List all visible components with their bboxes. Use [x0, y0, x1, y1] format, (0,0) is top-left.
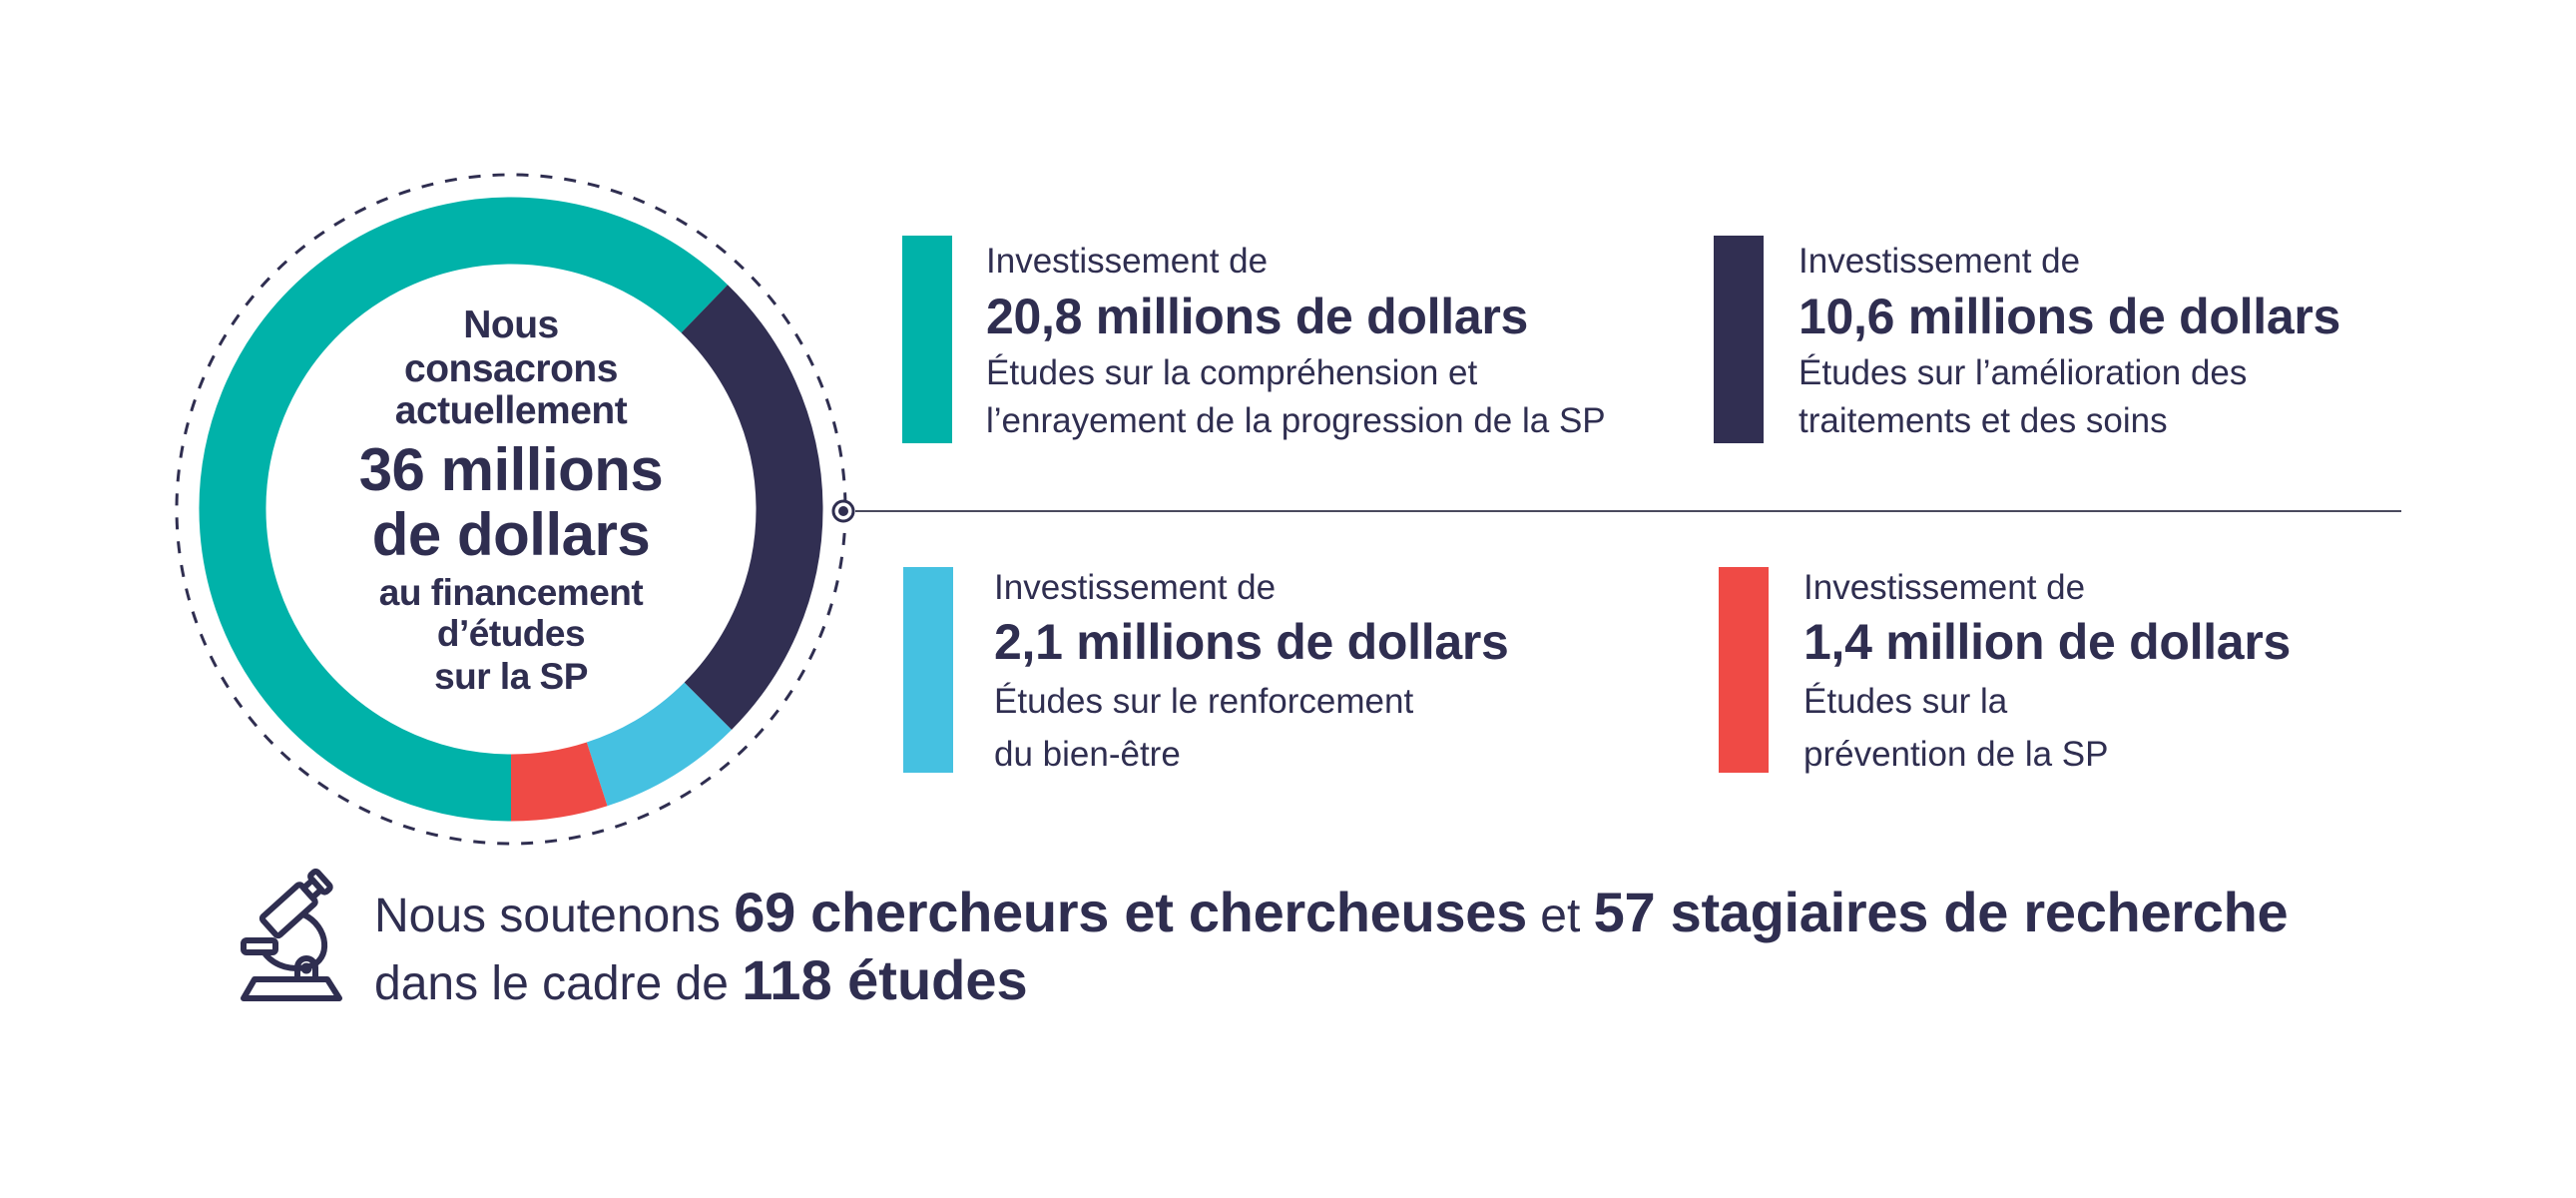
segment: red 1.4: [511, 774, 597, 788]
panel: light blue 2.1: 2,1 millions de dollars: [994, 614, 1509, 670]
panel: red 1.4: 1,4 million de dollars: [1803, 614, 2291, 670]
panel: dark 10.6: Études sur l’amélioration des: [1799, 353, 2247, 392]
center text: 36 millions: [359, 436, 663, 503]
panel: light blue 2.1: du bien-être: [994, 735, 1181, 774]
panel: dark 10.6: [1714, 236, 2340, 443]
panel: teal 20.8: l’enrayement de la progression de la SP: [986, 401, 1606, 440]
panel: red 1.4: [1719, 567, 2291, 774]
donut chart: [176, 174, 854, 845]
panel: teal 20.8: Études sur la compréhension et: [986, 353, 1477, 392]
center text: actuellement: [395, 389, 628, 432]
center text: d’études: [437, 613, 585, 654]
panel: dark 10.6: 10,6 millions de dollars: [1799, 289, 2340, 344]
panel: teal 20.8: 20,8 millions de dollars: [986, 289, 1528, 344]
panel: light blue 2.1: Investissement de: [994, 568, 1276, 607]
panel: teal 20.8: Investissement de: [986, 242, 1268, 281]
center text: sur la SP: [434, 656, 588, 697]
connector line: [855, 510, 2401, 512]
bottom statement: dans le cadre de 118 études: [374, 948, 1028, 1011]
connector dot: [833, 501, 853, 521]
bottom statement: [374, 881, 2288, 1011]
center text: consacrons: [404, 347, 618, 390]
center text: Nous: [463, 303, 559, 346]
center text: au financement: [379, 572, 643, 613]
panel: light blue 2.1: [903, 567, 1509, 774]
segment: dark 10.6: [705, 308, 789, 706]
icon: microscope: [241, 869, 342, 1001]
segment: light blue 2.1: [597, 706, 708, 774]
bottom statement: Nous soutenons 69 chercheurs et chercheuses et 57 stagiaires de recherche: [374, 881, 2288, 943]
panel: teal 20.8: [902, 236, 1606, 443]
center text: de dollars: [372, 501, 650, 568]
panel: dark 10.6: Investissement de: [1799, 242, 2080, 281]
center text: [359, 303, 663, 697]
panel: dark 10.6: traitements et des soins: [1799, 401, 2168, 440]
segment: teal 20.8: [233, 231, 705, 788]
dashed outer ring: [177, 175, 845, 844]
panel: red 1.4: prévention de la SP: [1803, 735, 2108, 774]
panel: light blue 2.1: Études sur le renforcement: [994, 682, 1413, 721]
panel: red 1.4: Investissement de: [1803, 568, 2085, 607]
panel: red 1.4: Études sur la: [1803, 682, 2007, 721]
